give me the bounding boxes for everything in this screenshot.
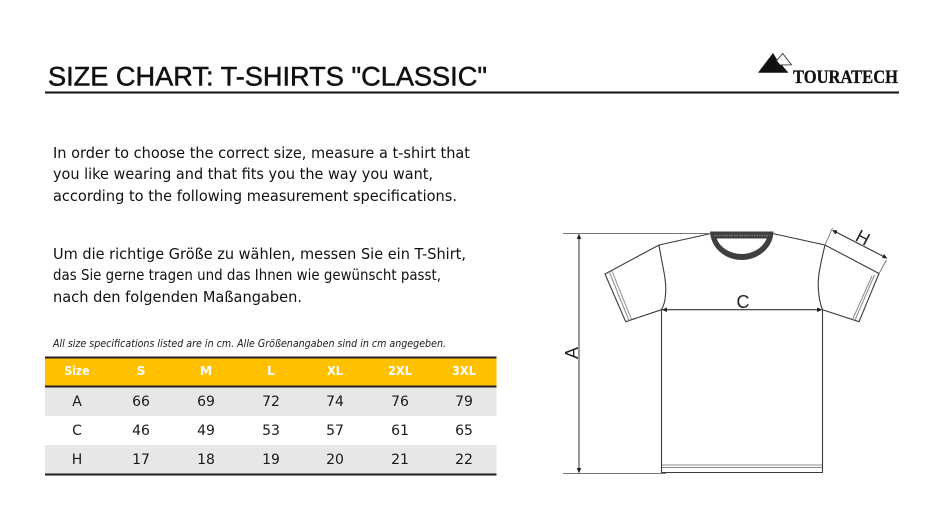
measurement H arrow: H bbox=[852, 226, 873, 250]
text block: English instructions: according to the following measurement specifications. bbox=[53, 187, 457, 205]
row H: 18 bbox=[197, 452, 215, 468]
table header row: Size bbox=[64, 363, 90, 378]
header bbox=[45, 53, 899, 94]
text block: German instructions: nach den folgenden Maßangaben. bbox=[53, 288, 302, 306]
row A: A bbox=[72, 394, 82, 410]
row C: 46 bbox=[132, 423, 150, 439]
text block: English instructions bbox=[53, 144, 470, 205]
measurement H arrow bbox=[825, 226, 888, 274]
text block: English instructions: In order to choose the correct size, measure a t-shirt that bbox=[53, 144, 470, 162]
text block: German instructions: Um die richtige Größe zu wählen, messen Sie ein T-Shirt, bbox=[53, 245, 466, 263]
table header row: 3XL bbox=[452, 363, 476, 378]
row H: 19 bbox=[262, 452, 280, 468]
row H: 20 bbox=[326, 452, 344, 468]
row C: 65 bbox=[455, 423, 473, 439]
table header row: 2XL bbox=[388, 363, 412, 378]
row C: 49 bbox=[197, 423, 215, 439]
row H bbox=[45, 445, 496, 474]
row A: 76 bbox=[391, 394, 409, 410]
text block: German instructions: das Sie gerne tragen und das Ihnen wie gewünscht passt, bbox=[53, 266, 441, 284]
note: units: All size specifications listed are in cm. Alle Größenangaben sind in cm angegeben. bbox=[52, 338, 446, 350]
measurement A arrow bbox=[562, 234, 711, 474]
row C: C bbox=[72, 423, 82, 439]
row H: 22 bbox=[455, 452, 473, 468]
table header row: XL bbox=[327, 363, 343, 378]
text block: English instructions: you like wearing and that fits you the way you want, bbox=[53, 165, 433, 183]
row C: 57 bbox=[326, 423, 344, 439]
table header row bbox=[45, 357, 496, 386]
row A: 79 bbox=[455, 394, 473, 410]
t-shirt outline bbox=[605, 234, 879, 472]
text block: German instructions bbox=[53, 245, 466, 306]
title: SIZE CHART: T-SHIRTS "CLASSIC" bbox=[48, 62, 487, 92]
row A: 69 bbox=[197, 394, 215, 410]
row C: 61 bbox=[391, 423, 409, 439]
row C: 53 bbox=[262, 423, 280, 439]
row H: 17 bbox=[132, 452, 150, 468]
measurement C arrow bbox=[662, 292, 822, 312]
measurement A arrow: A bbox=[562, 347, 582, 359]
row H: 21 bbox=[391, 452, 409, 468]
t-shirt diagram bbox=[562, 226, 888, 474]
size table bbox=[45, 356, 496, 476]
row A: 72 bbox=[262, 394, 280, 410]
table header row: L bbox=[267, 363, 275, 378]
logo: Touratech: TOURATECH bbox=[793, 68, 899, 88]
row A: 74 bbox=[326, 394, 344, 410]
measurement C arrow: C bbox=[736, 292, 750, 312]
row A bbox=[45, 386, 496, 416]
table header row: S bbox=[136, 363, 146, 378]
row H: H bbox=[72, 452, 82, 468]
row C bbox=[72, 423, 473, 439]
row A: 66 bbox=[132, 394, 150, 410]
logo: Touratech bbox=[758, 53, 899, 88]
collar bbox=[710, 232, 774, 260]
table header row: M bbox=[200, 363, 212, 378]
